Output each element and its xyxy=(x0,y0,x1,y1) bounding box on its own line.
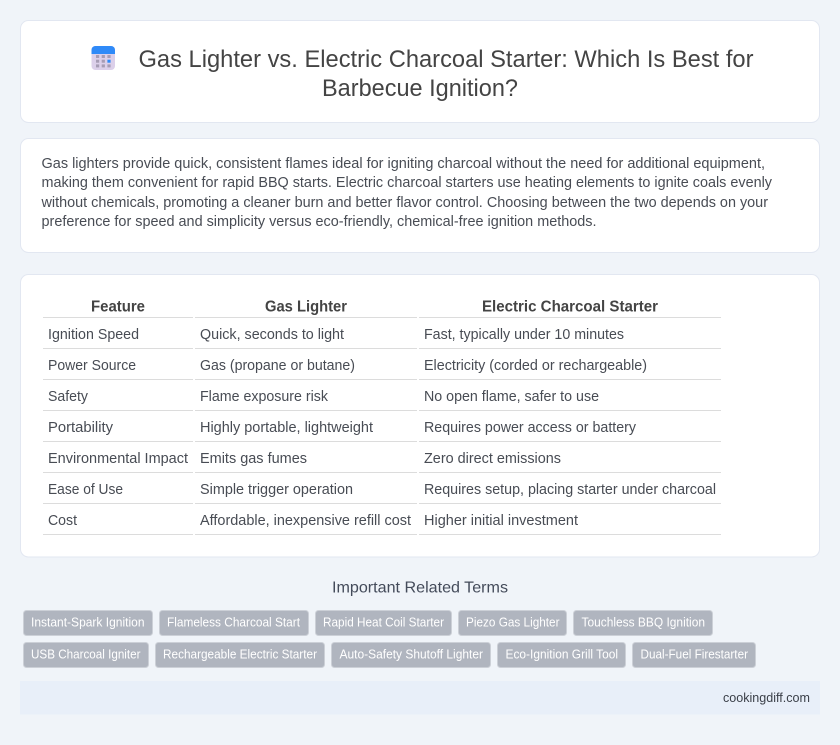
row: environmental impact: Environmental Impact xyxy=(48,451,188,467)
tags: related terms: Piezo Gas Lighter xyxy=(466,616,560,630)
row: safety: Flame exposure risk xyxy=(200,389,329,405)
row: ease of use: Simple trigger operation xyxy=(200,482,353,498)
tags: related terms: USB Charcoal Igniter xyxy=(31,648,140,662)
row: portability: Requires power access or battery xyxy=(424,420,637,436)
row: environmental impact xyxy=(48,451,561,467)
footer: cookingdiff.com xyxy=(723,690,810,705)
icon: calendar xyxy=(92,46,115,70)
tags: related terms: Flameless Charcoal Start xyxy=(167,616,300,630)
row: cost: Affordable, inexpensive refill cost xyxy=(200,513,411,529)
row: portability xyxy=(48,420,637,436)
row: ignition speed xyxy=(48,327,624,343)
title: Gas Lighter vs. Electric Charcoal Starter: Which Is Best for xyxy=(138,46,754,73)
row: portability: Highly portable, lightweight xyxy=(200,420,373,436)
tags: related terms: Touchless BBQ Ignition xyxy=(582,616,705,630)
title: Barbecue Ignition? xyxy=(322,75,518,102)
tags: related terms: Rapid Heat Coil Starter xyxy=(323,616,444,630)
row: ignition speed: Quick, seconds to light xyxy=(200,327,344,343)
row: power source: Power Source xyxy=(48,358,136,374)
tags: related terms: Auto-Safety Shutoff Lighter xyxy=(340,648,483,662)
tags: related terms: Dual-Fuel Firestarter xyxy=(640,648,748,662)
row: ease of use: Ease of Use xyxy=(48,482,123,498)
row: ignition speed: Ignition Speed xyxy=(48,327,139,343)
tags: related terms: Rechargeable Electric Starter xyxy=(163,648,317,662)
row: power source xyxy=(48,358,647,374)
row: safety: No open flame, safer to use xyxy=(424,389,599,405)
tags: related terms xyxy=(24,610,756,668)
heading: important related terms: Important Related Terms xyxy=(332,580,508,596)
table header row xyxy=(91,298,658,316)
footer xyxy=(20,681,820,714)
row: power source: Gas (propane or butane) xyxy=(200,358,355,374)
panel: summary text: Gas lighters provide quick, consistent flames ideal for igniting charcoal without the need for additional equipment, xyxy=(42,156,765,172)
panel: comparison table xyxy=(20,274,820,557)
row: portability: Portability xyxy=(48,420,114,436)
panel: summary text xyxy=(20,138,820,252)
tags: related terms: Instant-Spark Ignition xyxy=(31,616,145,630)
table header row: Electric Charcoal Starter xyxy=(482,298,658,316)
row: safety xyxy=(48,389,599,405)
row: ease of use: Requires setup, placing starter under charcoal xyxy=(424,482,716,498)
row: cost: Higher initial investment xyxy=(424,513,578,529)
row: power source: Electricity (corded or rechargeable) xyxy=(424,358,647,374)
row: environmental impact: Zero direct emissions xyxy=(424,451,561,467)
row: safety: Safety xyxy=(48,389,89,405)
row: cost: Cost xyxy=(48,513,77,529)
panel: summary text: without chemicals, promoting a cleaner burn and better flavor control. Choosing between the two depends on your xyxy=(40,195,768,211)
row: ease of use xyxy=(48,482,716,498)
panel: header xyxy=(20,20,820,122)
row: cost xyxy=(48,513,578,529)
panel: summary text: preference for speed and simplicity versus eco-friendly, chemical-free ignition methods. xyxy=(42,214,596,230)
title xyxy=(138,46,754,102)
table header row: Feature xyxy=(91,298,145,316)
panel: summary text: making them convenient for rapid BBQ starts. Electric charcoal starters use heating elements to ignite coals evenly xyxy=(42,175,773,191)
table header row: Gas Lighter xyxy=(265,298,347,316)
row: ignition speed: Fast, typically under 10 minutes xyxy=(424,327,624,343)
tags: related terms: Eco-Ignition Grill Tool xyxy=(506,648,618,662)
row: environmental impact: Emits gas fumes xyxy=(200,451,307,467)
